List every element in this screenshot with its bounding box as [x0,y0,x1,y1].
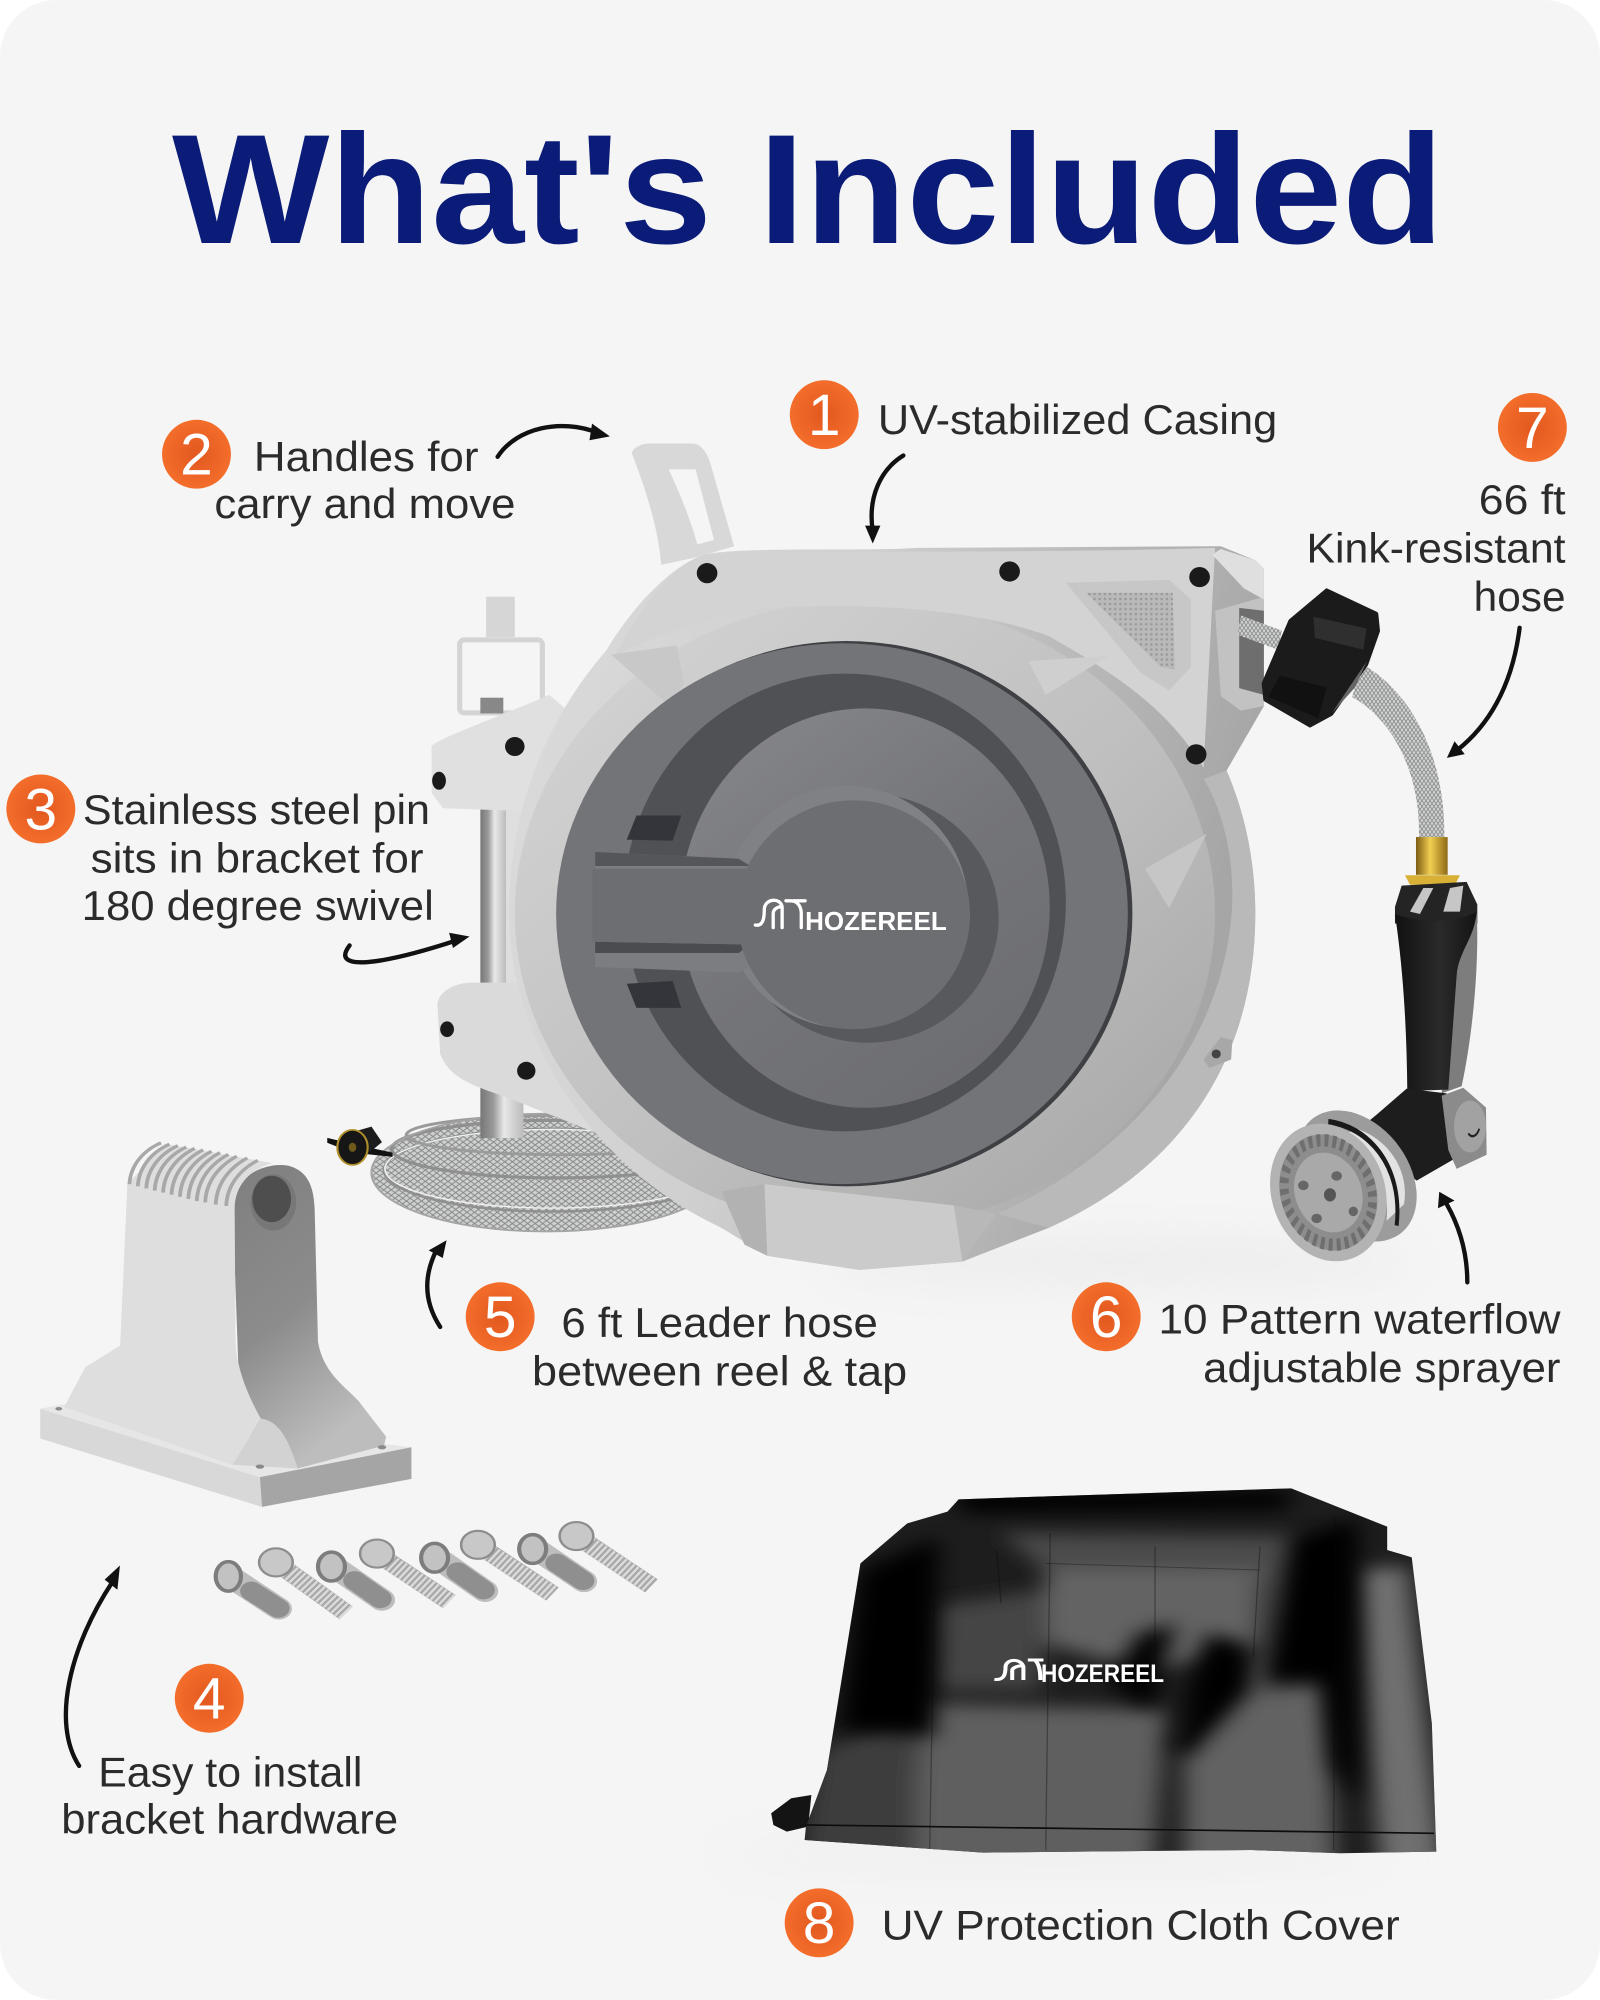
callout 7: kink-resistant hose [1307,393,1567,758]
title: What's Included [172,103,1444,277]
callouts layer [6,380,1567,1957]
badge 1: 1 [808,383,841,448]
logo icon: elephant [755,900,805,928]
badge 5 [466,1282,535,1351]
bracket hardware: anchors and screws [216,1522,651,1613]
vent triangle [1066,580,1191,690]
label 4 [61,1748,398,1842]
upper pin loop [460,597,542,713]
callout 3: pin [6,774,470,962]
steel swivel pin [480,807,523,1138]
reel handle [632,444,734,565]
floor shadows [710,1248,1420,1863]
tower top ribs [129,1143,258,1206]
label 3 [82,786,434,929]
label 7: 66 ft [1479,476,1566,523]
label 8: UV Protection Cloth Cover [882,1901,1400,1948]
base plate [40,1404,411,1507]
screw heads [259,1522,593,1576]
nozzle dial [1442,1088,1487,1169]
badge 7 [1498,393,1567,462]
flexible hose [1357,680,1432,838]
label 6: adjustable sprayer [1203,1344,1560,1391]
label 2: Handles for [254,433,478,480]
label 4: Easy to install [98,1748,362,1795]
brass fitting [1405,837,1460,885]
logo wordmark: HOZEREEL [805,908,947,936]
label 3: 180 degree swivel [82,882,434,929]
badge 3: 3 [25,777,57,842]
screws [277,1537,651,1613]
cover logo wordmark: HOZEREEL [1041,1660,1164,1688]
wall bracket [40,1143,411,1507]
arrow 7 [1447,628,1520,758]
inner ring shadow [737,794,999,1043]
badge 5: 5 [484,1285,516,1350]
arrow 5 [427,1240,447,1327]
reel hub and arm [592,800,970,1029]
label 5: 6 ft Leader hose [561,1299,878,1346]
callout 8: cover [785,1888,1400,1957]
hose outlet slot [1212,549,1264,711]
arrow 6 [1438,1192,1467,1282]
badge 3 [6,774,75,843]
coiled leader hose [327,1114,722,1232]
label 6: 10 Pattern waterflow [1159,1295,1561,1342]
spray hose and nozzle [1239,591,1487,1282]
front gusset [233,1419,298,1468]
cover buckle [771,1795,811,1832]
arrow 1 [865,456,903,544]
label 4: bracket hardware [61,1795,398,1842]
arrow 4 [66,1566,120,1766]
nozzle neck [1357,1089,1453,1181]
label 3: Stainless steel pin [83,786,430,833]
label 5: between reel & tap [532,1348,907,1395]
cover folds and highlights [800,1490,1443,1870]
anchors [228,1547,584,1609]
callout 4: hardware [61,1566,398,1842]
casing top plate [615,548,1215,768]
cover logo icon [994,1660,1043,1680]
callout 6: sprayer [1072,1192,1561,1391]
screw holes [432,561,1210,1080]
cover logo [994,1660,1043,1680]
callout 1: casing [790,380,1277,544]
hose reel [432,444,1264,1270]
hub logo [755,900,947,936]
anchor heads [216,1535,546,1591]
label 7: hose [1474,573,1566,620]
badge 2 [162,420,231,489]
lower bracket arm [437,983,595,1132]
label 7 [1307,476,1566,620]
badge 4 [175,1664,244,1733]
inner ring bevel [725,786,968,1028]
badge 1 [790,380,859,449]
black locking knob [1263,591,1378,725]
casing facets [611,646,1206,1270]
label 7: Kink-resistant [1307,525,1566,572]
arrow 2 [498,424,610,457]
tower light face [64,1144,273,1465]
badge 4: 4 [193,1667,226,1732]
callout 2: handles [162,420,610,527]
label 5 [532,1299,907,1395]
nozzle grip [1395,882,1477,1093]
label 2: carry and move [214,480,515,527]
leader hose connector [327,1127,392,1165]
hose inlet [1239,625,1280,640]
upper bracket arm [432,695,595,813]
arrow 3 [345,933,470,962]
badge 7: 7 [1516,396,1549,461]
badge 8 [785,1888,854,1957]
UV protection cloth cover [771,1488,1443,1870]
badge 6 [1072,1282,1141,1351]
reel faceplate outer [561,641,1132,1186]
reel arm bevel [595,816,759,1008]
spray head [1257,1085,1432,1282]
faceplate mid ring [680,708,1050,1108]
faceplate dark ring [624,674,1066,1131]
label 6 [1159,1295,1561,1391]
badge 2: 2 [180,423,213,488]
base holes [55,1407,386,1469]
casing body [509,546,1264,1270]
badge 6: 6 [1090,1285,1123,1350]
label 1: UV-stabilized Casing [878,396,1277,443]
pin socket [251,1174,296,1230]
label 2 [214,433,515,527]
right rim shade [997,771,1255,1228]
cover body [805,1488,1436,1853]
callout 5: leader hose [427,1240,907,1395]
tower dark side [233,1165,386,1468]
rear lug [1204,1037,1232,1068]
casing front face [515,600,1215,1228]
badge 8: 8 [803,1891,835,1956]
label 3: sits in bracket for [91,835,424,882]
